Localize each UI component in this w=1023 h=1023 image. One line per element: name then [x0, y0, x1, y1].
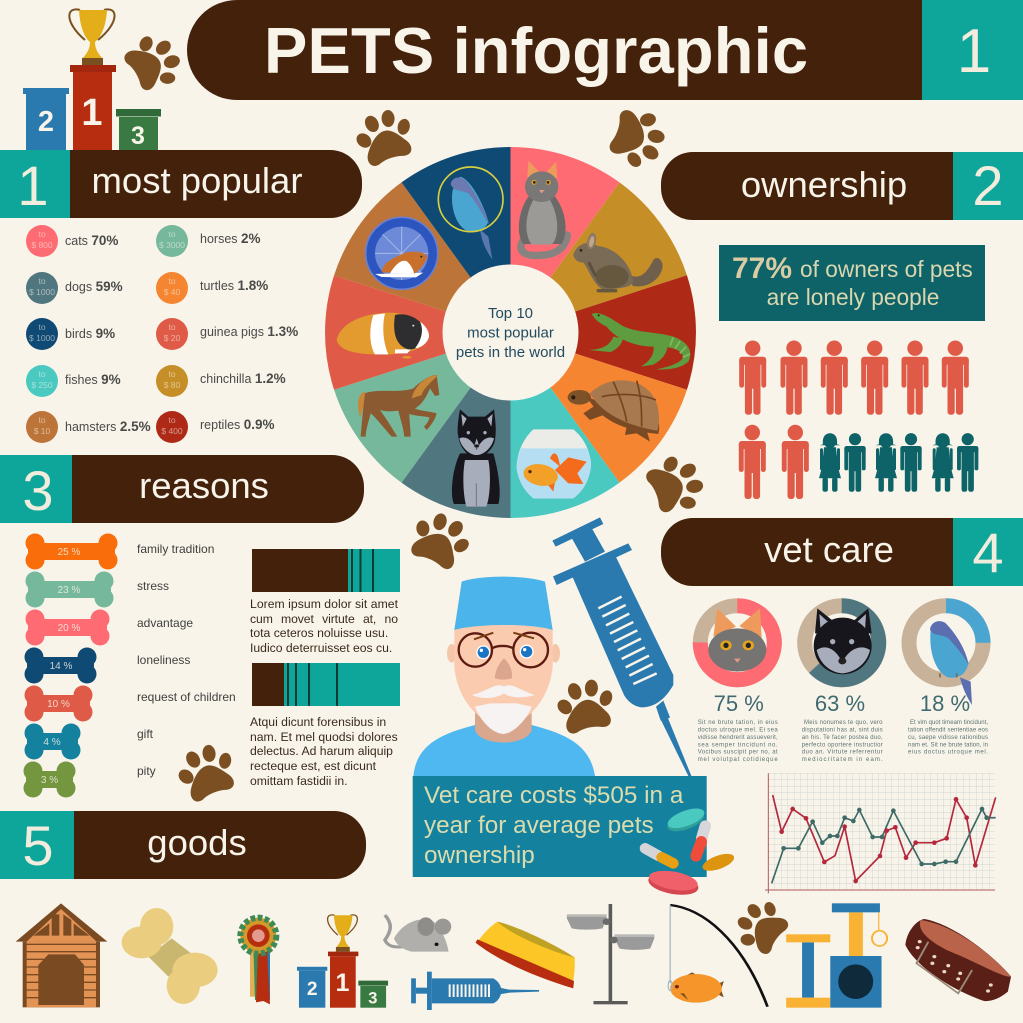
- section header: reasons: [0, 455, 364, 523]
- donut caption 3: tation offendit sententiae eos: [908, 728, 988, 734]
- podium with trophy: 2: [38, 106, 54, 138]
- most popular list: chinchilla 1.2%: [200, 371, 286, 386]
- donut caption 2: perfecto oportere instructior: [802, 742, 883, 748]
- icon: hamster wheel in wheel: [366, 217, 438, 289]
- donut caption 3: nam et. Sit ne brute tation, in: [908, 742, 988, 748]
- good: toy mouse: [385, 915, 451, 952]
- donut caption 1: [698, 720, 778, 763]
- most popular list: horses 2%: [200, 231, 261, 246]
- donut: bird 18%: 18 %: [920, 691, 970, 716]
- most popular list: hamsters 2.5%: [65, 419, 151, 434]
- most popular list: $ 3000: [159, 240, 185, 250]
- reasons labels: gift: [137, 727, 154, 741]
- bones: reasons chart: 23 %: [58, 585, 81, 596]
- most popular list: $ 250: [31, 380, 53, 390]
- most popular list: to: [38, 369, 46, 379]
- podium with trophy: [23, 9, 161, 150]
- paragraph 2: [250, 715, 398, 788]
- most popular list: cats 70%: [65, 233, 118, 248]
- good: cat tower: [786, 903, 887, 1008]
- donut caption 2: Meis nonumes te quo, vero: [804, 720, 883, 726]
- icon: horse in wheel: [358, 375, 439, 437]
- donut caption 1: Vocibus suscipit per no, at: [698, 750, 778, 756]
- most popular list: $ 10: [34, 426, 51, 436]
- donut caption 1: Sit ne brute tation, in eius: [698, 720, 778, 726]
- bones: reasons chart: 14 %: [50, 661, 73, 672]
- most popular list: to: [168, 229, 176, 239]
- most popular list: birds 9%: [65, 326, 115, 341]
- bar: stacked 2: [252, 663, 400, 706]
- podium with trophy: 3: [131, 122, 145, 150]
- donut: dog 63%: 63 %: [815, 691, 865, 716]
- most popular list: turtles 1.8%: [200, 278, 268, 293]
- section header: reasons: 3: [22, 459, 54, 522]
- icon: husky in wheel: [452, 409, 500, 507]
- section header: most popular: most popular: [92, 160, 302, 201]
- reasons labels: request of children: [137, 690, 236, 704]
- vet cost callout: ownership: [424, 842, 535, 869]
- section header: vet care: 4: [972, 521, 1004, 584]
- donut caption 2: [802, 720, 883, 763]
- paragraph 1: Iudico deterruisset eos cu.: [250, 641, 392, 655]
- donut: cat 75%: 75 %: [714, 691, 764, 716]
- vet cost callout: Vet care costs $505 in a: [424, 782, 684, 809]
- podium with trophy: 1: [81, 92, 103, 134]
- ownership callout: [719, 245, 985, 321]
- ownership callout: 77%: [732, 252, 792, 285]
- most popular list: to: [38, 322, 46, 332]
- bones: reasons chart: 10 %: [47, 699, 70, 710]
- section header: goods: goods: [147, 822, 247, 863]
- most popular list: $ 800: [31, 240, 53, 250]
- icon: chinchilla in wheel: [573, 232, 663, 292]
- good: pet bowl: [475, 922, 575, 988]
- paragraph 1: Lorem ipsum dolor sit amet: [250, 597, 399, 611]
- reasons labels: pity: [137, 764, 156, 778]
- section header: reasons: reasons: [139, 465, 269, 506]
- icon: cat in wheel: [519, 161, 567, 256]
- good: bowl stand: [567, 904, 654, 1004]
- section header: most popular: [0, 150, 362, 218]
- paragraph 2: omittam fastidii in.: [250, 774, 348, 788]
- good: podium: 2: [307, 979, 317, 1000]
- most popular list: reptiles 0.9%: [200, 417, 275, 432]
- paragraph 1: tota ceteros noluisse usu.: [250, 626, 388, 640]
- good: podium: 3: [368, 990, 377, 1008]
- title banner: 1: [957, 17, 991, 86]
- paragraph 2: recteque est, est dicunt: [250, 759, 377, 773]
- donut caption 2: duo an. Virtute referrentur: [802, 750, 883, 756]
- vet cost callout: year for average pets: [424, 812, 654, 839]
- vet cost callout: [413, 776, 707, 877]
- reasons labels: loneliness: [137, 653, 190, 667]
- most popular list: $ 40: [164, 287, 181, 297]
- line chart: [765, 773, 996, 893]
- section header: vet care: [661, 518, 1023, 586]
- icon: budgerigar in ring in wheel: [438, 167, 503, 259]
- bones: reasons chart: [24, 534, 118, 798]
- donut caption 3: [908, 720, 988, 756]
- icon: lizard in wheel: [589, 313, 690, 369]
- good: fishing rod with fish: [668, 905, 768, 1007]
- most popular list: to: [168, 322, 176, 332]
- good: podium: 1: [336, 969, 350, 997]
- most popular list: guinea pigs 1.3%: [200, 324, 298, 339]
- donut caption 3: eius doctus utroque mel.: [908, 750, 988, 756]
- donut caption 2: an his. Te facer postea duo,: [802, 735, 883, 741]
- most popular list: $ 20: [164, 333, 181, 343]
- title banner: PETS infographic: [264, 14, 808, 87]
- good: small syringe: [411, 972, 539, 1010]
- donut caption 2: disputationi has at, sint duis: [802, 728, 883, 734]
- icon: pills: [645, 805, 736, 898]
- most popular list: $ 1000: [29, 333, 55, 343]
- paragraph 1: cum movet virtute at, no: [250, 612, 398, 626]
- pie wheel: top 10 pets: pets in the world: [456, 344, 565, 361]
- good: dog house: [16, 903, 107, 1007]
- decorative paws: [118, 24, 796, 963]
- pie wheel: top 10 pets: Top 10: [488, 305, 533, 322]
- good: studded collar: [905, 919, 1011, 1001]
- most popular list: to: [168, 415, 176, 425]
- pie wheel: top 10 pets: [325, 147, 696, 518]
- section header: ownership: 2: [972, 154, 1004, 217]
- most popular list: to: [168, 276, 176, 286]
- donut: dog 63%: [805, 606, 879, 716]
- paragraph 2: nam. Et mel quodsi dolores: [250, 730, 398, 744]
- most popular list: to: [38, 229, 46, 239]
- most popular list: to: [38, 415, 46, 425]
- most popular list: dogs 59%: [65, 279, 123, 294]
- donut caption 3: cu, saepe vidisse rationibus: [908, 735, 988, 741]
- title banner: [187, 0, 1023, 100]
- paragraph 2: delectus. Ad harum aliquip: [250, 744, 393, 758]
- donut caption 1: mel volutpat cotidieque: [698, 757, 778, 763]
- donut: bird 18%: [909, 606, 983, 716]
- ownership callout: of owners of pets: [800, 256, 973, 282]
- donut caption 1: vidisse hendrerit assueverit,: [698, 735, 778, 741]
- section header: goods: 5: [22, 814, 54, 877]
- bones: reasons chart: 20 %: [58, 623, 81, 634]
- bones: reasons chart: 4 %: [43, 737, 61, 748]
- icon: turtle in wheel: [568, 380, 659, 442]
- section header: most popular: 1: [17, 154, 49, 217]
- donut caption 1: sea semper tincidunt no.: [698, 742, 778, 748]
- bones: reasons chart: 25 %: [58, 547, 81, 558]
- bones: reasons chart: 3 %: [41, 775, 58, 786]
- veterinarian illustration: [413, 577, 595, 776]
- icon: syringe large: [552, 517, 692, 777]
- most popular list: $ 1000: [29, 287, 55, 297]
- most popular list: to: [168, 369, 176, 379]
- most popular list: [26, 225, 298, 443]
- ownership callout: are lonely people: [767, 284, 939, 310]
- good: podium: [297, 915, 388, 1008]
- donut caption 3: Et vim quot timeam tincidunt,: [910, 720, 988, 726]
- paragraph 1: [250, 597, 399, 655]
- reasons labels: stress: [137, 579, 169, 593]
- pie wheel: top 10 pets: most popular: [467, 324, 554, 342]
- icon: goldfish bowl in wheel: [517, 429, 591, 498]
- bar: stacked 1: [252, 549, 400, 592]
- section header: ownership: ownership: [741, 164, 907, 205]
- section header: goods: [0, 811, 366, 879]
- donut caption 1: doctus utroque mel. Ei sea: [698, 728, 778, 734]
- pictogram: people: [739, 340, 978, 499]
- reasons labels: advantage: [137, 616, 193, 630]
- paragraph 2: Atqui dicunt forensibus in: [250, 715, 386, 729]
- reasons labels: family tradition: [137, 542, 214, 556]
- section header: ownership: [661, 152, 1023, 220]
- most popular list: $ 80: [164, 380, 181, 390]
- good: bone: [122, 908, 218, 1004]
- good: rosette: [240, 918, 276, 1004]
- most popular list: fishes 9%: [65, 372, 121, 387]
- reasons labels: [137, 542, 236, 778]
- section header: vet care: vet care: [764, 529, 894, 570]
- icon: guinea pig in wheel: [337, 313, 429, 359]
- most popular list: to: [38, 276, 46, 286]
- most popular list: $ 400: [161, 426, 183, 436]
- donut: cat 75%: [700, 606, 774, 716]
- donut caption 2: mediocritatem in eam.: [802, 757, 883, 763]
